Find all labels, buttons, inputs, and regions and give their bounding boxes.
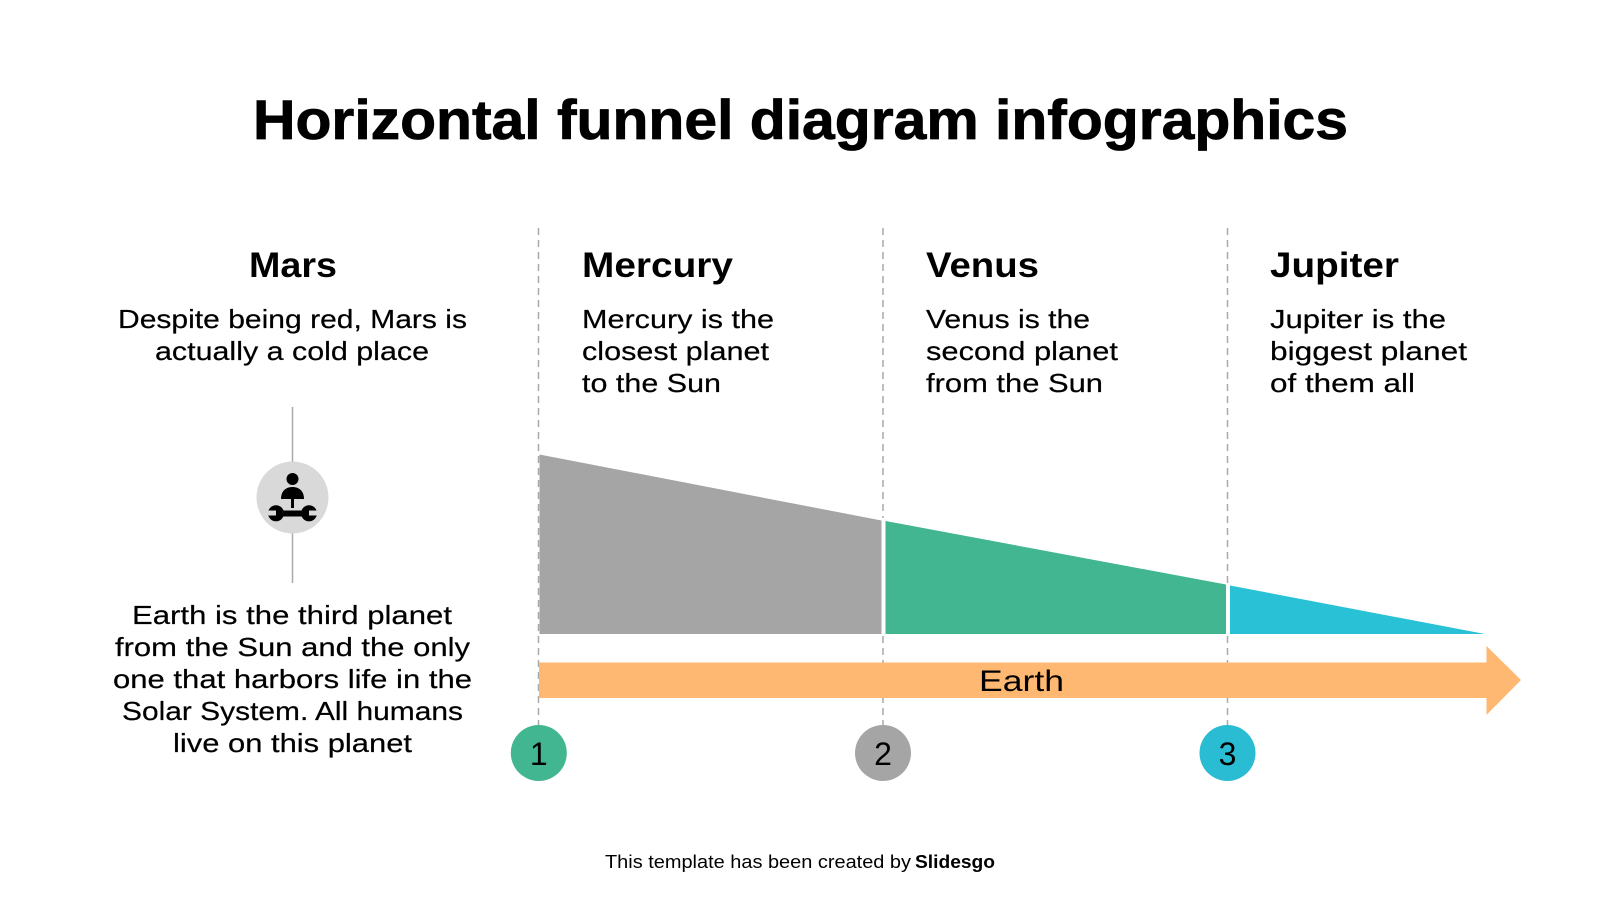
marker 3 [1200,725,1256,781]
heading: Mercury: Mercury [582,246,734,285]
footer credit: Slidesgo [915,852,995,872]
text block: Mercury description: to the Sun [582,368,721,398]
text block: Earth description: live on this planet [173,728,413,758]
title: Horizontal funnel diagram infographics [253,88,1348,151]
panel: Mars [118,246,467,366]
text block: Venus description: Venus is the [926,304,1090,334]
arrow: Earth [539,646,1521,715]
text block: Venus description: from the Sun [926,368,1103,398]
funnel segment: gray [540,454,882,634]
text block: Earth description: Solar System. All humans [122,696,463,726]
arrow: Earth: Earth [979,665,1064,698]
text block: Mercury description: closest planet [582,336,770,366]
text block: Earth description: from the Sun and the only [115,632,470,662]
funnel chart [540,454,1485,634]
heading: Jupiter: Jupiter [1270,246,1399,285]
text block: Mars description: Despite being red, Mars is [118,304,467,334]
text block: Earth description [113,600,472,758]
footer credit: This template has been created by [605,852,911,872]
panel: Mercury [582,246,774,398]
text block: Mercury description [582,304,774,398]
text block: Jupiter description [1270,304,1468,398]
text block: Jupiter description: Jupiter is the [1270,304,1446,334]
text block: Jupiter description: biggest planet [1270,336,1468,366]
panel: Venus [926,246,1119,398]
marker 1 [511,725,567,781]
text block: Earth description: Earth is the third planet [132,600,453,630]
heading: Venus: Venus [926,246,1039,285]
funnel segment: green [886,521,1226,634]
text block: Venus description [926,304,1119,398]
text block: Venus description: second planet [926,336,1119,366]
heading: Mars: Mars [249,246,337,285]
text block: Mars description [118,304,467,366]
marker 2: 2 [874,736,892,772]
text block: Jupiter description: of them all [1270,368,1415,398]
text block: Mars description: actually a cold place [155,336,429,366]
text block: Earth description: one that harbors life in the [113,664,472,694]
text block: Mercury description: Mercury is the [582,304,774,334]
marker 2 [855,725,911,781]
panel: Jupiter [1270,246,1468,398]
icon: engineer with wrench [256,407,328,583]
marker 3: 3 [1219,736,1236,772]
marker 1: 1 [530,736,548,772]
funnel segment: blue [1230,586,1485,634]
